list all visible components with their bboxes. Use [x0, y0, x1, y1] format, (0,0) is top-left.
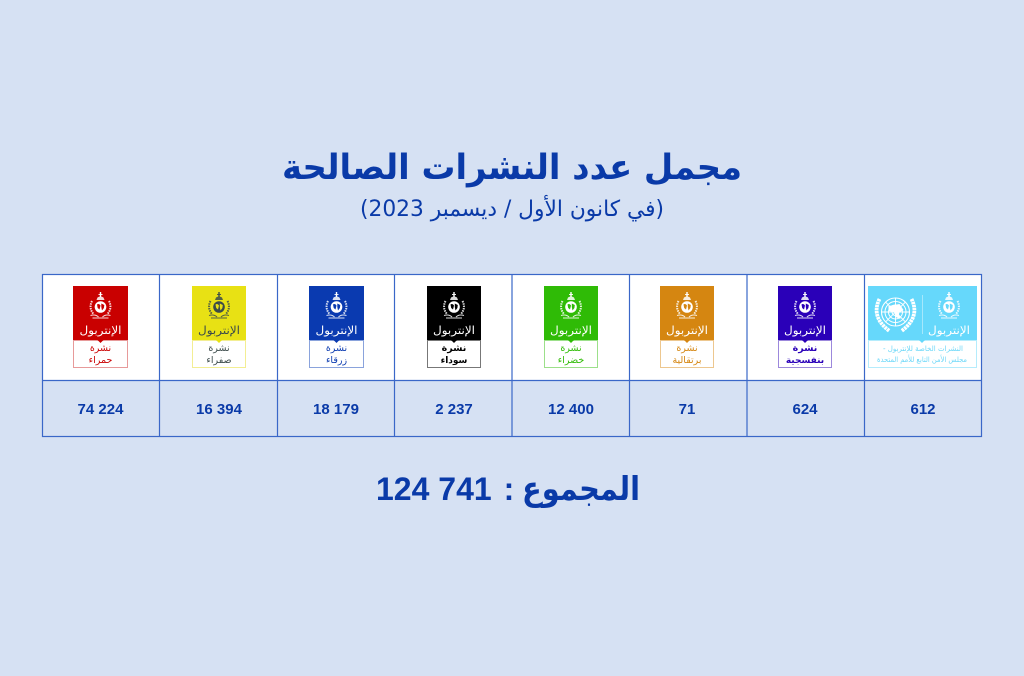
- title: مجمل عدد النشرات الصالحة: [282, 148, 742, 188]
- notice: green: الإنتربول: [550, 324, 592, 337]
- subtitle: (في كانون الأول / ديسمبر 2023): [360, 195, 664, 222]
- notice: INTERPOL-UN special: [868, 286, 977, 368]
- notice: blue: الإنتربول: [316, 324, 358, 337]
- total: المجموع: [522, 469, 640, 509]
- notice: black: سوداء: [441, 356, 468, 366]
- total: :: [504, 471, 514, 507]
- notice: orange: الإنتربول: [666, 324, 708, 337]
- counts row: [78, 401, 936, 418]
- notice: orange: [660, 286, 714, 368]
- notice: red: نشرة: [90, 343, 111, 354]
- notice: blue: [309, 286, 364, 368]
- notice: violet: بنفسجية: [786, 356, 824, 366]
- notice: INTERPOL-UN special: الإنتربول: [928, 324, 970, 337]
- notice: green: [544, 286, 598, 368]
- notice: orange: برتقالية: [672, 355, 702, 366]
- counts row: 612: [910, 401, 936, 418]
- table of notices: [42, 274, 982, 436]
- notice: blue: زرقاء: [326, 355, 347, 366]
- counts row: 16 394: [196, 401, 243, 418]
- notice: green: نشرة: [560, 343, 582, 354]
- notice: red: الإنتربول: [80, 324, 122, 337]
- total: [376, 469, 640, 509]
- notice: yellow: [192, 286, 246, 368]
- notice: black: [427, 286, 481, 368]
- notice: red: [73, 286, 128, 368]
- notice: black: الإنتربول: [433, 324, 475, 337]
- notice: yellow: نشرة: [208, 343, 230, 354]
- notice: violet: نشرة: [793, 343, 817, 354]
- counts row: 71: [679, 401, 695, 418]
- notice: black: نشرة: [442, 343, 466, 354]
- notice: violet: [778, 286, 832, 368]
- counts row: 624: [792, 401, 818, 418]
- notice: yellow: صفراء: [206, 355, 232, 366]
- notice: blue: نشرة: [326, 343, 347, 354]
- notice: violet: الإنتربول: [784, 324, 826, 337]
- notice: orange: نشرة: [676, 343, 698, 354]
- counts row: 74 224: [78, 401, 124, 418]
- notice: green: خضراء: [558, 355, 584, 366]
- total: 124 741: [376, 471, 492, 507]
- notice: INTERPOL-UN special: مجلس الأمن التابع للأمم المتحدة: [877, 354, 967, 364]
- counts row: 18 179: [313, 401, 359, 418]
- notice: INTERPOL-UN special: النشرات الخاصة للإنتربول -: [883, 344, 963, 353]
- counts row: 2 237: [435, 401, 473, 418]
- notice: red: حمراء: [89, 355, 112, 366]
- notice: yellow: الإنتربول: [198, 324, 240, 337]
- counts row: 12 400: [548, 401, 594, 418]
